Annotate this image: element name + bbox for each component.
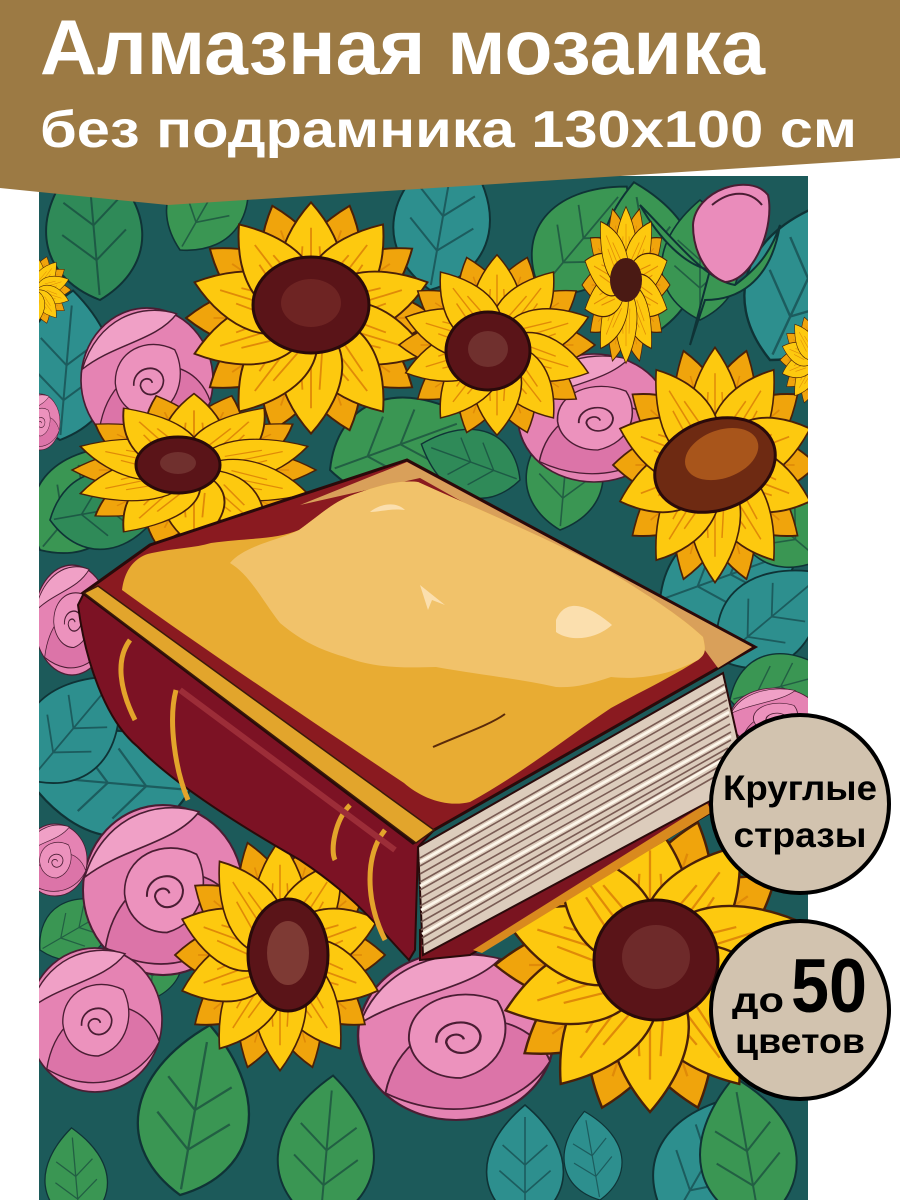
roses bbox=[20, 308, 820, 1120]
sunflower: left bbox=[71, 390, 317, 550]
rose bud: top right bbox=[640, 185, 780, 345]
book: cover edge bbox=[300, 462, 752, 668]
sunflower: top centre right bbox=[398, 250, 596, 440]
book: cover highlight bbox=[230, 482, 705, 687]
sunflower: right edge fragment bbox=[780, 316, 808, 404]
book bbox=[78, 460, 755, 960]
badge: up to 50 colours: 50 bbox=[791, 944, 867, 1029]
sunflower: top centre left bbox=[185, 196, 437, 440]
picture: mosaic artwork bbox=[39, 176, 808, 1200]
book: spine bbox=[78, 593, 434, 960]
sunflower: left edge fragment bbox=[39, 256, 72, 324]
book: golden cover bbox=[122, 482, 705, 804]
book: lower cover gold edge bbox=[473, 803, 712, 953]
book: pages bbox=[418, 673, 738, 955]
badge: round rhinestones bbox=[711, 715, 889, 893]
book: cover glints bbox=[370, 504, 612, 638]
book: gold spine strip bbox=[84, 586, 434, 843]
book: lower cover bbox=[419, 802, 710, 962]
book: cover crease bbox=[433, 714, 505, 747]
badge: up to 50 colours bbox=[711, 921, 889, 1099]
badge: round rhinestones: Круглые bbox=[723, 769, 877, 808]
foliage bbox=[39, 181, 808, 1200]
title: Алмазная мозаика bbox=[40, 3, 766, 91]
sunflower: bottom right bbox=[494, 811, 806, 1119]
subtitle: без подрамника 130х100 см bbox=[40, 101, 857, 159]
book: top cover board bbox=[83, 460, 755, 843]
badge: up to 50 colours: до bbox=[732, 981, 784, 1020]
sunflower: small upper right bbox=[582, 203, 670, 367]
sunflower: bottom left bbox=[174, 833, 386, 1077]
artwork base bbox=[39, 176, 808, 1200]
badge: up to 50 colours: цветов bbox=[735, 1022, 865, 1061]
banner bbox=[0, 0, 900, 205]
sunflower: right with brown head bbox=[612, 341, 818, 589]
badge: round rhinestones: стразы bbox=[734, 816, 866, 855]
